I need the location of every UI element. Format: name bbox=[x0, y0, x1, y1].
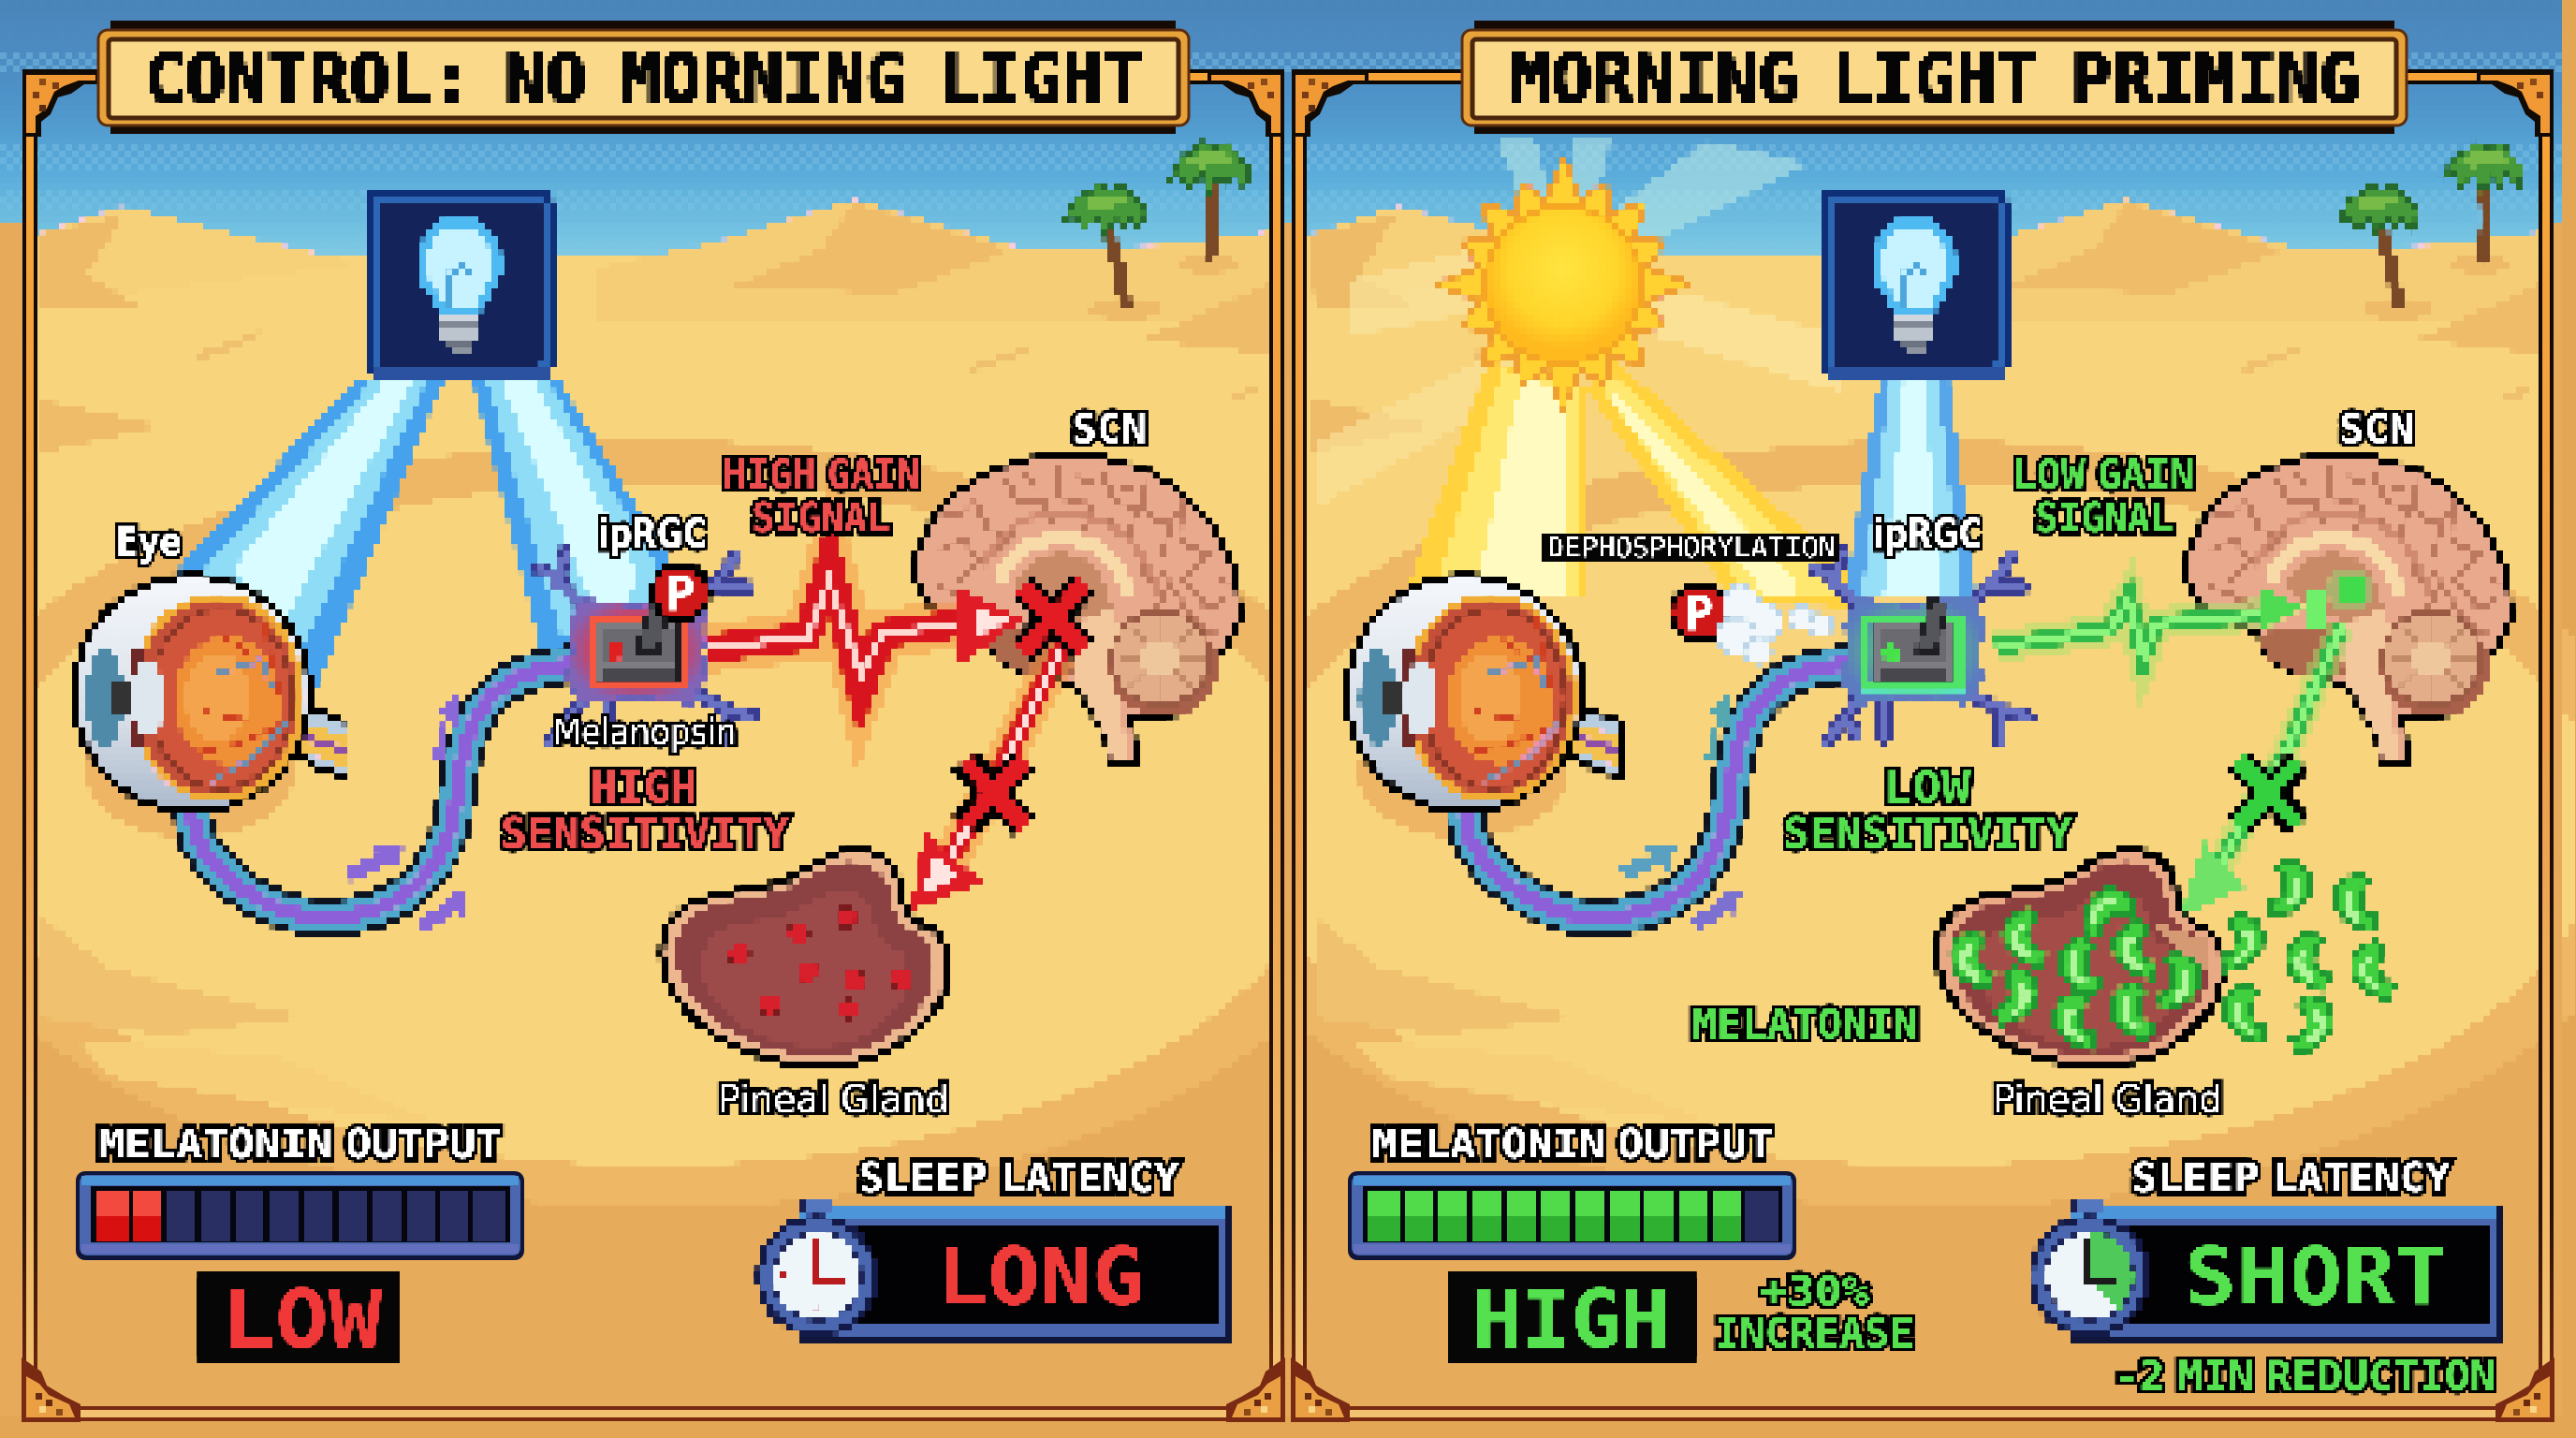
title plaque: control: CONTROL: NO MORNING LIGHT bbox=[144, 39, 1144, 120]
eye and nerve tube bbox=[74, 576, 599, 917]
phosphate P badge bbox=[652, 565, 709, 621]
value: LONG: LONG bbox=[936, 1231, 1144, 1324]
label: Pineal Gland: Pineal Gland bbox=[1993, 1078, 2222, 1122]
callout: -2 min reduction: -2 MIN REDUCTION bbox=[2114, 1353, 2496, 1401]
label: melatonin output: MELATONIN OUTPUT bbox=[98, 1121, 502, 1168]
callout: +30% increase: +30% bbox=[1760, 1268, 1870, 1315]
label: ipRGC: ipRGC bbox=[598, 510, 707, 558]
diagram artwork: priming bbox=[1320, 140, 2511, 1362]
label: Eye: Eye bbox=[116, 519, 182, 565]
desert background with frame bbox=[0, 0, 1288, 1206]
label: high gain signal: SIGNAL bbox=[752, 494, 890, 542]
icon: light bulb bbox=[1820, 188, 2009, 380]
label: low gain signal: SIGNAL bbox=[2035, 494, 2174, 542]
melatonin crescents released bbox=[2221, 859, 2393, 1053]
ipRGC neuron, high sensitivity bbox=[538, 551, 753, 742]
label: Pineal Gland: Pineal Gland bbox=[718, 1078, 949, 1122]
icon: sun bbox=[1436, 157, 1690, 412]
label: dephosphorylation: DEPHOSPHORYLATION bbox=[1547, 532, 1836, 564]
high gain signal arrow bbox=[706, 565, 1022, 690]
value: HIGH: HIGH bbox=[1472, 1273, 1670, 1367]
low gain signal arrow bbox=[1996, 588, 2328, 656]
panel frame bbox=[1291, 69, 2554, 1422]
sunlight beams bbox=[1320, 140, 1863, 609]
SCN brain bbox=[916, 457, 1240, 761]
HIGH readout box bbox=[1450, 1272, 1694, 1362]
LOW readout box bbox=[199, 1272, 402, 1362]
sleep latency panel: long bbox=[759, 1198, 1228, 1341]
text labels: priming bbox=[1372, 405, 2496, 1401]
value: LOW: LOW bbox=[222, 1273, 382, 1367]
value: SHORT: SHORT bbox=[2184, 1231, 2448, 1324]
label: low sensitivity bbox=[1783, 762, 2072, 858]
P badge letter: P bbox=[666, 566, 695, 623]
pineal gland: full of melatonin bbox=[1937, 850, 2222, 1065]
signal to pineal gland, arrow bbox=[911, 646, 1062, 910]
label: high gain signal: HIGH GAIN bbox=[723, 451, 920, 499]
red X on pineal path bbox=[964, 760, 1024, 826]
P letter: P bbox=[1684, 586, 1714, 642]
label: melatonin: MELATONIN bbox=[1691, 1001, 1918, 1049]
label: low gain signal: LOW GAIN bbox=[2012, 451, 2194, 499]
title plaque: priming bbox=[1462, 21, 2407, 134]
phosphate P released bbox=[1671, 584, 1727, 640]
label: melatonin output: MELATONIN OUTPUT bbox=[1372, 1121, 1773, 1168]
text labels: control bbox=[98, 405, 1180, 1367]
sleep latency panel: short bbox=[2031, 1198, 2499, 1341]
title plaque: priming: MORNING LIGHT PRIMING bbox=[1510, 39, 2360, 120]
label: low sensitivity: SENSITIVITY bbox=[1783, 808, 2072, 858]
callout: +30% increase bbox=[1715, 1268, 1914, 1357]
label: high sensitivity: SENSITIVITY bbox=[501, 808, 789, 858]
melanopsin switch bbox=[596, 599, 677, 682]
eye and nerve tube bbox=[1347, 576, 1872, 917]
red X at SCN bbox=[1022, 585, 1084, 651]
pineal gland: depleted bbox=[662, 850, 947, 1065]
blue beam from bulb bbox=[1844, 380, 1977, 599]
label: SCN: SCN bbox=[1072, 405, 1147, 453]
callout: +30% increase: INCREASE bbox=[1715, 1310, 1914, 1357]
panel: morning light priming bbox=[1189, 0, 2576, 1438]
nerve flow arrows bbox=[347, 695, 468, 933]
ipRGC neuron, low sensitivity bbox=[1814, 551, 2028, 742]
label: SCN: SCN bbox=[2339, 405, 2414, 453]
desert background with frame bbox=[1288, 0, 2575, 1206]
label: ipRGC: ipRGC bbox=[1873, 510, 1983, 558]
melanopsin switch bbox=[1873, 599, 1954, 682]
title plaque: control bbox=[98, 21, 1189, 134]
label: sleep latency: SLEEP LATENCY bbox=[2131, 1154, 2452, 1202]
dephosphorylation puff bbox=[1718, 585, 1832, 664]
label: high gain signal bbox=[723, 451, 920, 542]
label: Melanopsin: Melanopsin bbox=[553, 712, 737, 753]
nerve flow arrows bbox=[1620, 695, 1741, 933]
label: high sensitivity: HIGH bbox=[591, 762, 696, 813]
label: high sensitivity bbox=[501, 762, 789, 858]
icon: light bulb bbox=[365, 188, 554, 380]
melatonin output bar: high bbox=[1348, 1171, 1796, 1260]
icon: stopwatch bbox=[759, 1198, 875, 1334]
light beams from bulb bbox=[172, 380, 676, 688]
SCN brain bbox=[2188, 457, 2511, 761]
green X on pineal path bbox=[2239, 760, 2299, 826]
label: sleep latency: SLEEP LATENCY bbox=[858, 1154, 1180, 1202]
panel: control, no morning light bbox=[0, 0, 1395, 1438]
label: low sensitivity: LOW bbox=[1883, 762, 1970, 813]
signal to pineal gland, arrow bbox=[2181, 625, 2342, 916]
diagram artwork: control bbox=[74, 188, 1240, 1362]
melatonin output bar: low bbox=[76, 1171, 524, 1260]
icon: stopwatch bbox=[2031, 1198, 2147, 1334]
label: low gain signal bbox=[2012, 451, 2194, 542]
panel frame bbox=[22, 69, 1285, 1422]
